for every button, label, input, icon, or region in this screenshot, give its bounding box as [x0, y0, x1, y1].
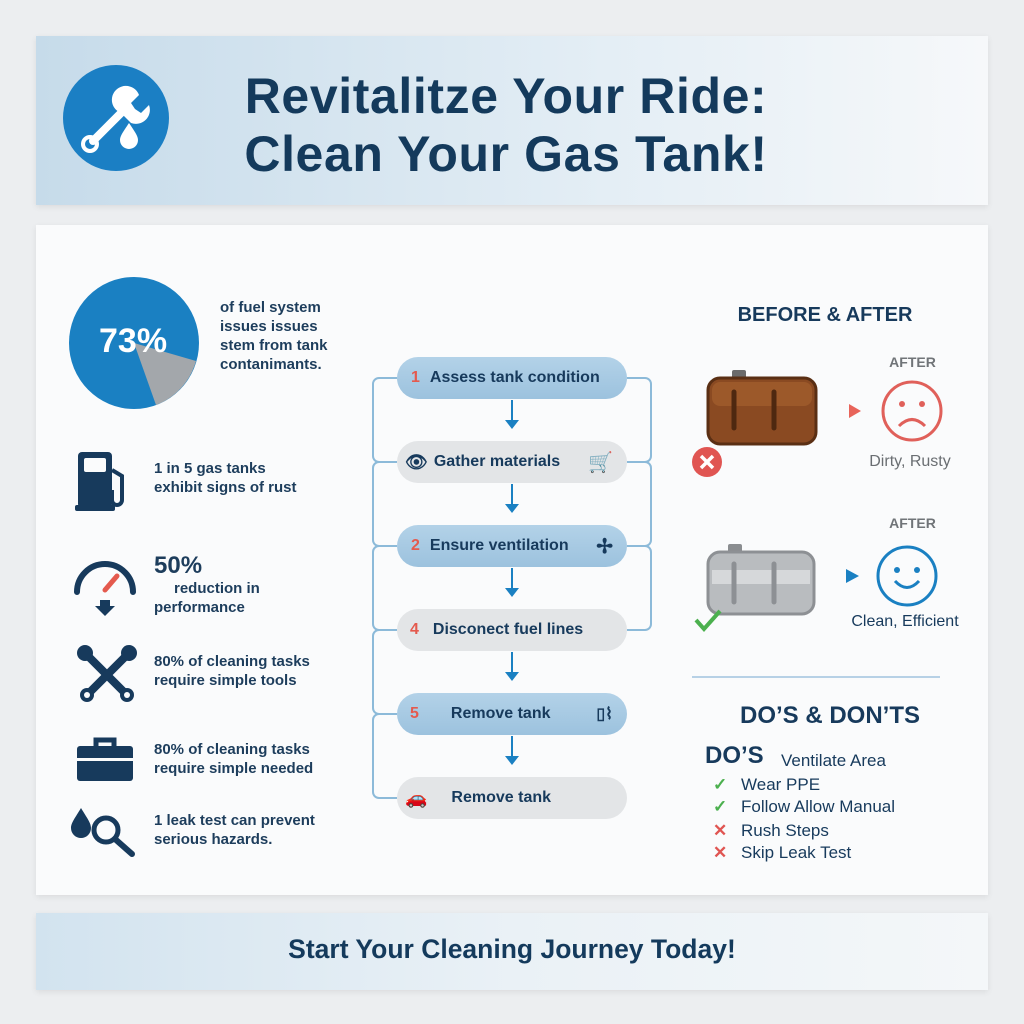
do's list: Rush Steps [741, 821, 829, 840]
icon: toolbox [77, 738, 133, 781]
step: remove tank (car): 🚗 [405, 788, 427, 808]
step 1 [397, 357, 627, 399]
before row 1 result: Dirty, Rusty [869, 453, 951, 470]
after row 2 result: Clean, Efficient [851, 613, 959, 630]
title: Clean Your Gas Tank! [244, 126, 768, 182]
after row 2 result: AFTER [889, 515, 936, 531]
step: gather materials: Gather materials [434, 453, 560, 470]
stat: 73% text [220, 299, 328, 373]
do's list: DO’S [705, 742, 764, 769]
do's list: Wear PPE [741, 775, 820, 794]
stat: leak test [154, 812, 315, 848]
step 2 [397, 525, 627, 567]
stat: 50%: reduction in [174, 580, 260, 597]
stat: needed: require simple needed [154, 760, 313, 777]
step: remove tank (car) [397, 777, 627, 819]
step 5: 5 [410, 705, 419, 722]
stat: 73% text: stem from tank [220, 337, 328, 354]
step 2: Ensure ventilation [430, 537, 569, 554]
step 2: ✢ [596, 536, 613, 558]
step 5: ▯⌇ [596, 706, 613, 723]
do's list: Ventilate Area [781, 751, 886, 770]
title [244, 68, 768, 182]
do's list: Follow Allow Manual [741, 797, 895, 816]
stat: 50%: 50% [154, 552, 202, 579]
do's list [705, 742, 895, 862]
step 4 [397, 609, 627, 651]
title: Revitalitze Your Ride: [245, 68, 767, 124]
stat: 73% text: issues issues [220, 318, 318, 335]
step 4: 4 [410, 621, 419, 638]
stat: 50% [154, 552, 260, 616]
step 5: Remove tank [451, 705, 550, 722]
icon: drop and magnifier [71, 808, 135, 857]
stat: leak test: serious hazards. [154, 831, 272, 848]
step 1: Assess tank condition [430, 369, 600, 386]
icon: rusty tank [692, 370, 818, 477]
step: gather materials: 👁 [405, 452, 428, 472]
icon: fuel pump [75, 452, 124, 511]
stat: rust [154, 460, 297, 496]
step: gather materials [397, 441, 627, 483]
step: remove tank (car): Remove tank [451, 789, 551, 806]
heading: do's & don'ts: DO’S & DON’TS [740, 702, 920, 729]
footer panel [36, 913, 988, 990]
do's list: ✕ [713, 843, 727, 862]
step 1: 1 [411, 369, 420, 386]
stat: tools: require simple tools [154, 672, 297, 689]
stat: leak test: 1 leak test can prevent [154, 812, 315, 829]
arrows [505, 400, 519, 765]
icon: wrench and drop [63, 65, 169, 171]
stat: 73% text: of fuel system [220, 299, 321, 316]
call to action: Start Your Cleaning Journey Today! [288, 934, 736, 964]
stat: needed [154, 741, 313, 777]
stat: rust: exhibit signs of rust [154, 479, 297, 496]
icon: gauge [74, 561, 136, 616]
pie chart 73% [69, 277, 199, 409]
before row 1 result: AFTER [889, 354, 936, 370]
do's list: Skip Leak Test [741, 843, 851, 862]
step 2: 2 [411, 537, 420, 554]
header panel [36, 36, 988, 205]
after row 2 result [846, 515, 959, 630]
heading: before & after: BEFORE & AFTER [738, 304, 912, 326]
before row 1 result [849, 354, 951, 470]
step 5 [397, 693, 627, 735]
step 4: Disconect fuel lines [433, 621, 583, 638]
do's list: ✓ [713, 797, 727, 816]
icon: clean tank [694, 544, 816, 632]
main panel [36, 225, 988, 895]
do's list: ✕ [713, 821, 727, 840]
stat: 73% text: contanimants. [220, 356, 322, 373]
stat: tools: 80% of cleaning tasks [154, 653, 310, 670]
stat: needed: 80% of cleaning tasks [154, 741, 310, 758]
step: gather materials: 🛒 [588, 452, 613, 474]
icon: wrenches [77, 645, 137, 702]
do's list: ✓ [713, 775, 727, 794]
stat: tools [154, 653, 310, 689]
pie chart 73%: 73% [99, 322, 167, 360]
flowchart connectors [372, 377, 652, 799]
stat: 50%: performance [154, 599, 245, 616]
stat: rust: 1 in 5 gas tanks [154, 460, 266, 477]
